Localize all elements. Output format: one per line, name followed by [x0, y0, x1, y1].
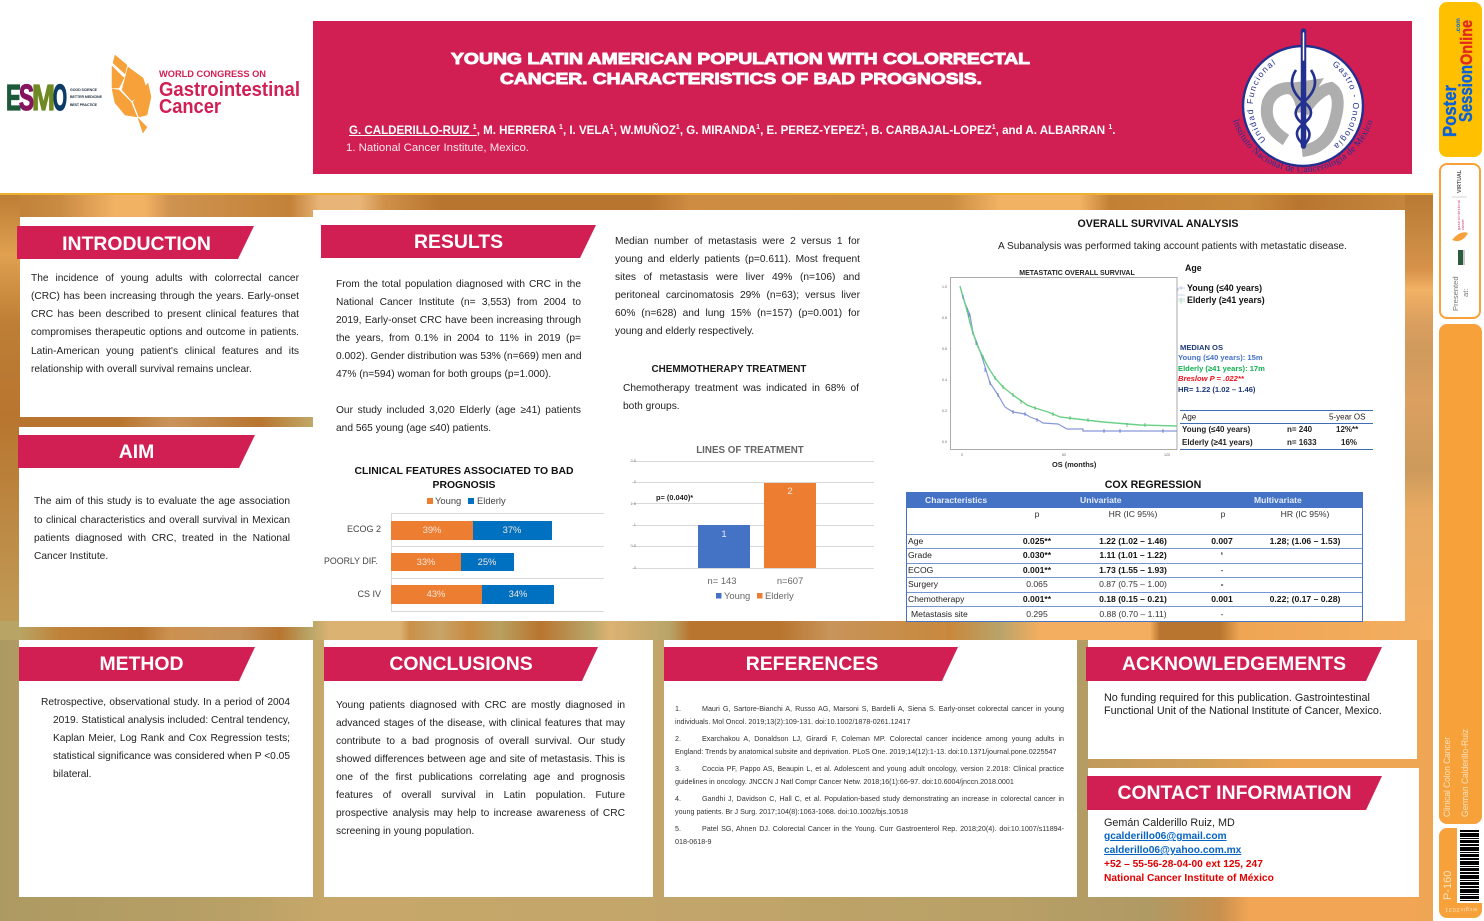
text: median OS: Breslow P = .022**	[1178, 374, 1244, 383]
table: cox regression: p	[1221, 509, 1226, 519]
list: references: 1.	[675, 705, 681, 713]
text: contact details: +52 – 55-56-28-04-00 ext 125, 247	[1104, 859, 1263, 870]
list: references: Mauri G, Sartore-Bianchi A, Russo AG, Marsoni S, Bardelli A, Siena S. Early-onset colorectal cancer in young	[702, 705, 1064, 713]
table: cox regression: HR (IC 95%)	[1281, 509, 1329, 519]
table: cox regression: Surgery	[908, 579, 939, 589]
text: metastasis results	[615, 236, 860, 337]
text: results first column: 2019, Early-onset CRC have been increasing through	[336, 315, 581, 326]
logo: Gastrointestinal leaf	[112, 54, 300, 133]
legend: age: Elderly (≥41 years)	[1187, 295, 1265, 305]
sidebar text: topic and author: Clinical Colon Cancer	[1441, 737, 1452, 817]
table: cox regression: -	[1221, 609, 1224, 619]
chart: metastatic overall survival: 1.0	[942, 285, 947, 289]
text: contact details: gcalderillo06@gmail.com	[1104, 831, 1227, 842]
chart: clinical features	[324, 466, 604, 612]
chart: metastatic overall survival: 0	[961, 453, 963, 457]
table: cox regression: HR (IC 95%)	[1109, 509, 1157, 519]
chart: metastatic overall survival: 0.6	[942, 347, 947, 351]
list: references: 2.	[675, 735, 681, 743]
barcode	[1457, 828, 1482, 903]
list: references: individuals. Mol Oncol. 2019;13(2):109-131. doi:10.1002/1878-0261.12417	[675, 718, 910, 726]
text: metastasis results: peritoneal carcinomatosis 29% (n=63); versus liver	[615, 290, 860, 301]
chart: lines of treatment: 2	[787, 486, 793, 497]
text: aim: Cancer Institute.	[34, 551, 108, 562]
chart: metastatic overall survival: METASTATIC OVERALL SURVIVAL	[1019, 270, 1135, 277]
panel: contact information	[1088, 768, 1419, 897]
sidebar: topic strip	[1439, 324, 1482, 824]
text: results first column: the years, from 0.1% in 2004 to 11% in 2019 (p=	[336, 333, 581, 344]
list: references: young patients. Br J Surg. 2017;104(8):1063-1068. doi:10.1002/bjs.10518	[675, 808, 908, 816]
logo: ESMO: BETTER MEDICINE	[70, 95, 103, 99]
chart: clinical features: 25%	[478, 556, 496, 567]
chart: clinical features: CS IV	[357, 589, 381, 599]
chart: clinical features: 33%	[417, 556, 435, 567]
text: aim: The aim of this study is to evaluate the age association	[34, 496, 290, 507]
text: introduction: CRC has been described to present clinical features that	[31, 309, 299, 320]
chart: clinical features: 43%	[427, 588, 445, 599]
table: cox regression: 0.22; (0.17 – 0.28)	[1270, 594, 1340, 604]
text: median OS: Elderly (≥41 years): 17m	[1178, 364, 1265, 373]
sidebar: presented at	[1439, 163, 1481, 319]
list: references: Patel SG, Ahnen DJ. Colorectal Cancer in the Young. Curr Gastroenterol Rep. 2018;20(4). doi:10.1007/s11894-	[702, 825, 1064, 833]
logo: Gastrointestinal leaf: Gastrointestinal	[159, 79, 300, 101]
text: contact details: Gemán Calderillo Ruiz, MD	[1104, 817, 1235, 829]
text: acknowledgements: Functional Unit of the National Institute of Cancer, Mexico.	[1104, 705, 1382, 717]
text: metastasis results: young and elderly patients (p=0.611). Most frequent	[615, 254, 860, 265]
table: cox regression: -	[1221, 565, 1224, 575]
text: aim: patients diagnosed with CRC, treated in the National	[34, 533, 290, 544]
logo: ESMO: S	[19, 77, 34, 118]
text: chemotherapy	[623, 383, 859, 412]
logo: ESMO: M	[32, 77, 55, 118]
sidebar text: poster session online	[1440, 18, 1476, 137]
heading: method	[19, 647, 255, 681]
table: 5-year OS: 16%	[1341, 438, 1357, 447]
chart: lines of treatment: n=607	[777, 575, 803, 586]
chart: clinical features: Elderly	[477, 495, 506, 506]
text: metastasis results: 60% (n=628) and lung 15% (n=157) (p=0.001) for	[615, 308, 860, 319]
heading: aim	[18, 435, 255, 468]
table: cox regression: Grade	[908, 550, 932, 560]
table: cox regression: 1.73 (1.55 – 1.93)	[1099, 565, 1167, 575]
heading: references: REFERENCES	[746, 652, 878, 674]
text: conclusions: prospective analysis may help to increase awareness of CRC	[336, 808, 625, 819]
chart: clinical features: POORLY DIF.	[324, 556, 378, 566]
chart: lines of treatment: LINES OF TREATMENT	[696, 445, 804, 456]
text: acknowledgements	[1104, 692, 1382, 717]
text: results first column: 47% (n=594) woman for both groups (p=1.000).	[336, 369, 551, 380]
panel: results	[313, 210, 1405, 621]
text: introduction: The incidence of young adults with colorrectal cancer	[31, 273, 299, 284]
table: cox regression: Metastasis site	[911, 609, 968, 619]
list: references: England: Trends by anatomical subsite and deprivation. PLoS One. 2019;14(12):1-13. doi:10.1371/journal.pone.0225547	[675, 748, 1057, 756]
legend: age: Age	[1185, 263, 1202, 273]
text: results first column	[336, 279, 582, 434]
table: cox regression: 0.87 (0.75 – 1.00)	[1099, 579, 1167, 589]
affiliation: 1. National Cancer Institute, Mexico.	[346, 142, 529, 154]
table: cox regression: 1.22 (1.02 – 1.46)	[1099, 536, 1167, 546]
text: metastasis results: young and elderly respectively.	[615, 326, 754, 337]
text: conclusions: screening in young population.	[336, 826, 474, 837]
chart: metastatic overall survival: 0.8	[942, 316, 947, 320]
table: cox regression	[906, 492, 1363, 622]
sidebar: poster number and barcode	[1439, 828, 1482, 918]
list: references: 4.	[675, 795, 681, 803]
text: median OS: HR= 1.22 (1.02 – 1.46)	[1178, 385, 1255, 394]
chart: clinical features: ECOG 2	[347, 524, 381, 534]
heading: aim: AIM	[119, 440, 154, 462]
chart: lines of treatment: Young	[724, 590, 750, 601]
list: references: 3.	[675, 765, 681, 773]
text: aim: to clinical characteristics and overall survival in Mexican	[34, 515, 290, 526]
sidebar text: poster session online: .com	[1456, 18, 1462, 33]
sidebar content: presented at: Presented	[1451, 276, 1460, 311]
heading: conclusions	[324, 647, 598, 681]
text: contact details: National Cancer Institute of México	[1104, 873, 1274, 884]
text: metastasis results: sites of metastasis were liver 49% (n=106) and	[615, 272, 860, 283]
background texture	[0, 193, 1433, 921]
panel: conclusions	[324, 640, 653, 897]
heading: cox regression: COX REGRESSION	[1105, 479, 1201, 491]
chart: clinical features: 37%	[503, 524, 521, 535]
heading: introduction: INTRODUCTION	[62, 232, 211, 254]
table: 5-year OS: Age	[1182, 412, 1197, 422]
chart: clinical features: Young	[435, 495, 461, 506]
legend: age	[1185, 263, 1265, 305]
text: method: bilateral.	[53, 769, 92, 780]
panel: introduction	[20, 217, 313, 417]
heading: chemotherapy treatment: CHEMMOTHERAPY TREATMENT	[652, 364, 806, 375]
heading: acknowledgements	[1086, 647, 1382, 681]
table: cox regression: Characteristics	[925, 495, 987, 505]
institutional seal: Instituto Nacional de Cancerología de México	[1233, 118, 1372, 172]
heading: method: METHOD	[99, 652, 184, 674]
text: introduction: compromises therapeutic options and outcome in patients.	[31, 327, 299, 338]
heading: results	[321, 225, 596, 258]
text: conclusions: Young patients diagnosed with CRC are mostly diagnosed in	[336, 700, 625, 711]
text: method: Kaplan Meier, Log Rank and Cox Regression tests;	[53, 733, 290, 744]
heading: overall survival analysis: OVERALL SURVIVAL ANALYSIS	[1078, 218, 1238, 230]
table: cox regression: Univariate	[1080, 495, 1122, 505]
chart: lines of treatment	[630, 445, 874, 601]
text: chemotherapy: Chemotherapy treatment was indicated in 68% of	[623, 383, 859, 394]
text: results first column: and 565 young (age ≤40) patients.	[336, 423, 491, 434]
institutional seal: Unidad Funcional	[1246, 59, 1276, 144]
table: 5-year OS	[1180, 410, 1373, 450]
table: 5-year OS: Elderly (≥41 years)	[1182, 438, 1253, 447]
poster title: YOUNG LATIN AMERICAN POPULATION WITH COLORRECTAL	[451, 51, 1030, 68]
chart: clinical features: 39%	[423, 524, 441, 535]
text: method: 2019. Statistical analysis included: Central tendency,	[53, 715, 290, 726]
heading: references	[664, 647, 958, 681]
heading: contact information	[1087, 776, 1382, 810]
chart: lines of treatment: 2	[634, 479, 637, 484]
table: 5-year OS: Young (≤40 years)	[1182, 425, 1251, 434]
chart: clinical features: CLINICAL FEATURES ASSOCIATED TO BAD	[354, 466, 574, 477]
panel: references	[664, 640, 1077, 897]
table: cox regression: 0.18 (0.15 – 0.21)	[1099, 594, 1167, 604]
poster title	[450, 51, 1030, 88]
table: cox regression: 0.001**	[1023, 565, 1052, 575]
text: conclusions: showed differences between age and site of metastasis. This is	[336, 754, 625, 765]
sidebar content: presented at: VIRTUAL	[1457, 170, 1463, 193]
table: cox regression: 0.88 (0.70 – 1.11)	[1099, 609, 1167, 619]
panel: acknowledgements	[1088, 640, 1417, 759]
table: 5-year OS: 5-year OS	[1329, 412, 1365, 422]
poster title: CANCER. CHARACTERISTICS OF BAD PROGNOSIS.	[500, 71, 982, 88]
chart: metastatic overall survival: 0.2	[942, 409, 947, 413]
sidebar content: presented at: at:	[1461, 289, 1470, 297]
logo: ESMO	[6, 77, 103, 118]
text: introduction	[31, 273, 299, 375]
heading: acknowledgements: ACKNOWLEDGEMENTS	[1122, 652, 1346, 674]
table: cox regression: 1.11 (1.01 – 1.22)	[1099, 550, 1167, 560]
text: conclusions: contribute to a bad prognosis of overall survival. Our study	[336, 736, 625, 747]
sidebar text: topic and author	[1441, 729, 1470, 817]
text: introduction: Latin-American young patient's clinical features and its	[31, 346, 299, 357]
list: references: guidelines in oncology. JNCCN J Natl Compr Cancer Netw. 2018;16(1):66-97. doi:10.6004/jnccn.2018.0001	[675, 778, 1014, 786]
text: metastasis results: Median number of metastasis were 2 versus 1 for	[615, 236, 860, 247]
heading: introduction	[17, 226, 254, 259]
heading: results: RESULTS	[414, 230, 503, 252]
sidebar text: poster session online: Online	[1457, 20, 1476, 65]
table: cox regression: 1.28; (1.06 – 1.53)	[1270, 536, 1340, 546]
text: contact details	[1104, 817, 1274, 884]
text: conclusions: advanced stages of the disease, with clinical features that may	[336, 718, 625, 729]
text: results first column: National Cancer Institute (n= 3,553) from 2004 to	[336, 297, 581, 308]
chart: clinical features: PROGNOSIS	[433, 480, 496, 491]
chart: metastatic overall survival: 60	[1062, 453, 1066, 457]
header banner	[313, 21, 1412, 174]
sidebar text: poster session online: Session	[1456, 65, 1476, 122]
chart: lines of treatment: 1	[721, 529, 727, 540]
chart: lines of treatment: 1.5	[630, 501, 637, 506]
table: cox regression: Age	[908, 536, 924, 546]
text: conclusions	[336, 700, 625, 837]
poster number: wcgic2021	[1445, 906, 1478, 912]
poster number: P-160	[1442, 871, 1454, 900]
authors: G. CALDERILLO-RUIZ 1, M. HERRERA 1, I. VELA1, W.MUÑOZ1, G. MIRANDA1, E. PEREZ-YEPEZ1, B. CARBAJAL-LOPEZ1, and A. ALBARRAN 1.	[349, 124, 1115, 137]
text: contact details: calderillo06@yahoo.com.mx	[1104, 845, 1241, 856]
text: chemotherapy: both groups.	[623, 401, 680, 412]
list: references: Exarchakou A, Donaldson LJ, Girardi F, Coleman MP. Colorectal cancer incidence among young adults in	[702, 735, 1064, 743]
logo: ESMO: BEST PRACTICE	[70, 103, 98, 107]
chart: lines of treatment: 1	[634, 522, 637, 527]
text: median OS	[1178, 343, 1265, 394]
chart: lines of treatment: 2.5	[630, 458, 637, 463]
chart: lines of treatment: 0	[634, 565, 637, 570]
chart: metastatic overall survival: 0.4	[942, 378, 947, 382]
logo: ESMO: O	[53, 77, 67, 118]
text: method: Retrospective, observational study. In a period of 2004	[41, 697, 290, 708]
text: aim	[34, 496, 290, 562]
list: references: Gandhi J, Davidson C, Hall C, et al. Population-based study demonstrating an increase in colorectal cancer in	[702, 795, 1064, 803]
text: introduction: relationship with overall survival remains unclear.	[31, 364, 252, 375]
table: cox regression: 0.065	[1026, 579, 1048, 589]
text: results first column: Our study included 3,020 Elderly (age ≥41) patients	[336, 405, 581, 416]
chart: lines of treatment: Elderly	[765, 590, 794, 601]
table: cox regression: -	[1221, 579, 1224, 589]
poster number	[1442, 871, 1478, 912]
text: conclusions: features of overall survival in Latin population. Future	[336, 790, 625, 801]
sidebar: poster session online	[1439, 2, 1482, 157]
chart: metastatic overall survival: 0.0	[942, 440, 947, 444]
text: introduction: (CRC) has been increasing through the years. Early-onset	[31, 291, 299, 302]
table: cox regression: p	[1035, 509, 1040, 519]
table: cox regression: Multivariate	[1254, 495, 1302, 505]
chart: lines of treatment: 0.5	[630, 543, 637, 548]
table: cox regression: Chemotherapy	[908, 594, 965, 604]
table: cox regression: ECOG	[908, 565, 934, 575]
list: references: 5.	[675, 825, 681, 833]
list: references	[675, 705, 1064, 846]
panel: aim	[19, 427, 313, 627]
text: subanalysis: A Subanalysis was performed taking account patients with metastatic disease.	[998, 241, 1347, 252]
chart: lines of treatment: n= 143	[708, 575, 736, 586]
heading: contact information: CONTACT INFORMATION	[1117, 782, 1352, 804]
sidebar content: presented at: cancer	[1461, 218, 1465, 230]
text: method: statistical significance was considered when P <0.05	[53, 751, 290, 762]
chart: clinical features: 34%	[509, 588, 527, 599]
heading: conclusions: CONCLUSIONS	[389, 652, 533, 674]
logo: Gastrointestinal leaf: WORLD CONGRESS ON	[159, 69, 266, 79]
chart: metastatic overall survival: 120	[1164, 453, 1170, 457]
chart: metastatic overall survival: OS (months)	[1052, 460, 1097, 469]
text: median OS: Young (≤40 years): 15m	[1178, 353, 1263, 362]
text: results first column: 0.002). Gender distribution was 53% (n=669) men and	[336, 351, 582, 362]
institutional seal	[1233, 28, 1372, 172]
text: method	[41, 697, 290, 780]
logo: Gastrointestinal leaf: Cancer	[159, 96, 221, 118]
sidebar text: poster session online: Poster	[1440, 85, 1460, 137]
logo: ESMO: GOOD SCIENCE	[70, 88, 98, 92]
table: cox regression: 0.001	[1211, 594, 1233, 604]
table: cox regression: 0.030**	[1023, 550, 1052, 560]
text: acknowledgements: No funding required for this publication. Gastrointestinal	[1104, 692, 1370, 704]
table: 5-year OS: n= 240	[1287, 425, 1313, 434]
text: results first column: From the total population diagnosed with CRC in the	[336, 279, 581, 290]
logo: ESMO: E	[6, 77, 21, 118]
table: 5-year OS: n= 1633	[1287, 438, 1317, 447]
table: cox regression: 0.007	[1211, 536, 1233, 546]
text: conclusions: one of the first publications correlating age and prognosis	[336, 772, 625, 783]
list: references: Coccia PF, Pappo AS, Beaupin L, et al. Adolescent and young adult oncology, version 2.2018: Clinical practice	[702, 765, 1064, 773]
chart: lines of treatment: p= (0.040)*	[656, 493, 693, 502]
table: 5-year OS: 12%**	[1336, 425, 1359, 434]
table: cox regression: 0.001**	[1023, 594, 1052, 604]
sidebar content: presented at: gastrointestinal	[1457, 200, 1461, 230]
sidebar text: topic and author: German Calderillo-Ruiz	[1459, 729, 1470, 817]
list: references: 018-0618-9	[675, 838, 712, 846]
table: cox regression: ‘	[1221, 550, 1223, 560]
table: cox regression: 0.025**	[1023, 536, 1052, 546]
legend: age: Young (≤40 years)	[1187, 283, 1262, 293]
table: cox regression: 0.295	[1026, 609, 1048, 619]
text: median OS: MEDIAN OS	[1180, 343, 1223, 352]
panel: method	[19, 640, 313, 897]
chart: metastatic overall survival	[942, 270, 1185, 469]
sidebar content: presented at	[1451, 170, 1470, 311]
institutional seal: Gastro - Oncología	[1333, 62, 1359, 148]
